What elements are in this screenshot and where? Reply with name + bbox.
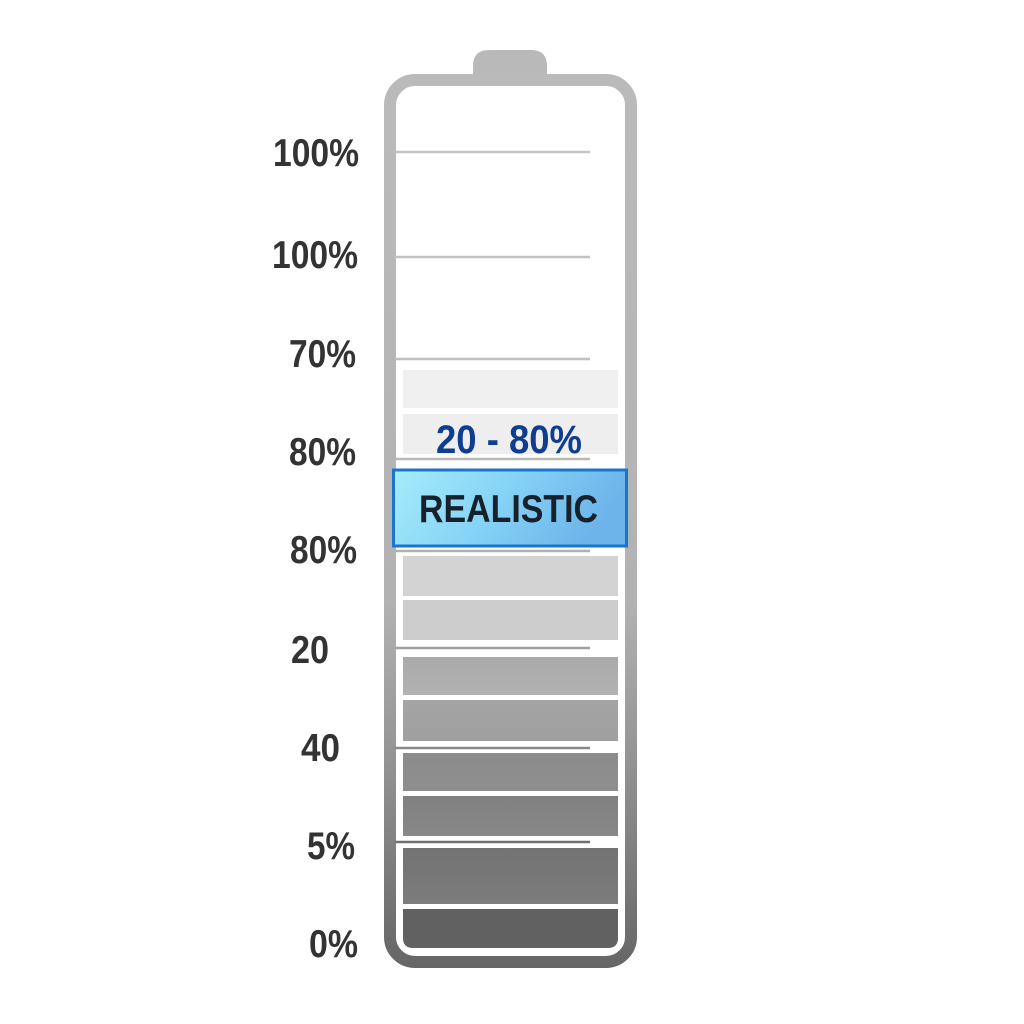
scale labels: 40: [301, 727, 340, 770]
battery shell: [390, 80, 631, 962]
level bars: [403, 370, 618, 948]
scale labels: 80%: [290, 529, 357, 572]
scale labels: 80%: [289, 431, 356, 474]
realistic zone highlight: REALISTIC: [419, 488, 598, 531]
scale labels: 20: [291, 629, 329, 672]
battery terminal: [473, 50, 547, 76]
scale labels: 5%: [307, 825, 355, 868]
scale labels: 100%: [273, 132, 359, 175]
range label: 20 - 80%: [436, 418, 582, 462]
scale labels: 0%: [309, 923, 358, 966]
realistic zone highlight: [394, 470, 626, 546]
scale labels: 100%: [272, 234, 358, 277]
tick lines: [395, 152, 590, 842]
scale labels: [272, 132, 359, 966]
scale labels: 70%: [289, 333, 356, 376]
